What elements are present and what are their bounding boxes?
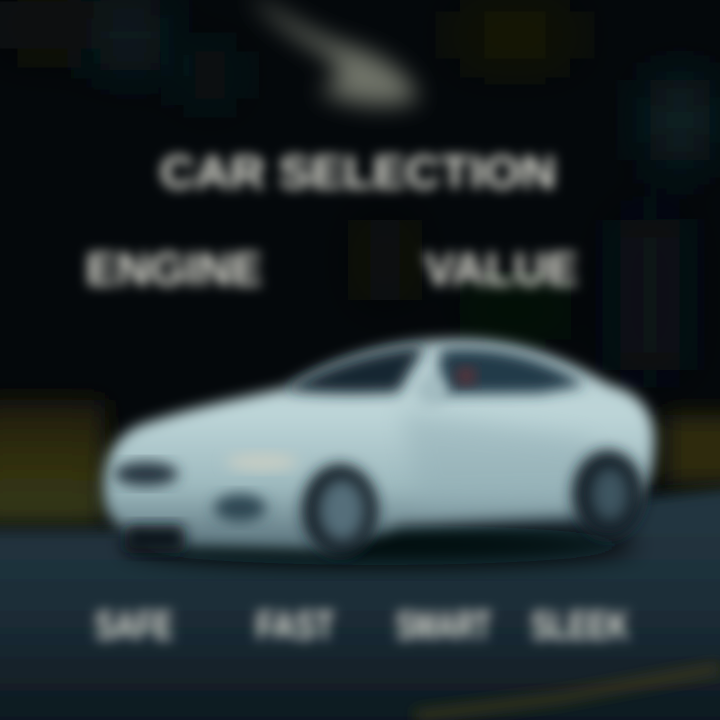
door mirror: [416, 375, 448, 405]
front wheel: [302, 464, 378, 556]
feature label 4: SLEEK: [531, 604, 629, 648]
door shading: [400, 410, 600, 505]
feature label 1: SAFE: [95, 604, 173, 648]
grass verge: [0, 400, 720, 525]
car: [104, 340, 655, 565]
road marking: [415, 668, 720, 716]
headlight and grille: [114, 462, 178, 486]
left heading: ENGINE: [86, 243, 262, 295]
feature label 3: SMART: [396, 604, 491, 648]
car shadow: [125, 525, 635, 565]
car body: [104, 340, 655, 550]
logo mark: [250, 0, 418, 105]
feature label 2: FAST: [256, 604, 334, 648]
rear wheel: [572, 450, 644, 538]
windows: [285, 346, 425, 393]
right heading: VALUE: [424, 243, 578, 295]
title: CAR SELECTION: [160, 146, 556, 198]
interior accent: [456, 367, 476, 385]
road: [0, 488, 720, 720]
